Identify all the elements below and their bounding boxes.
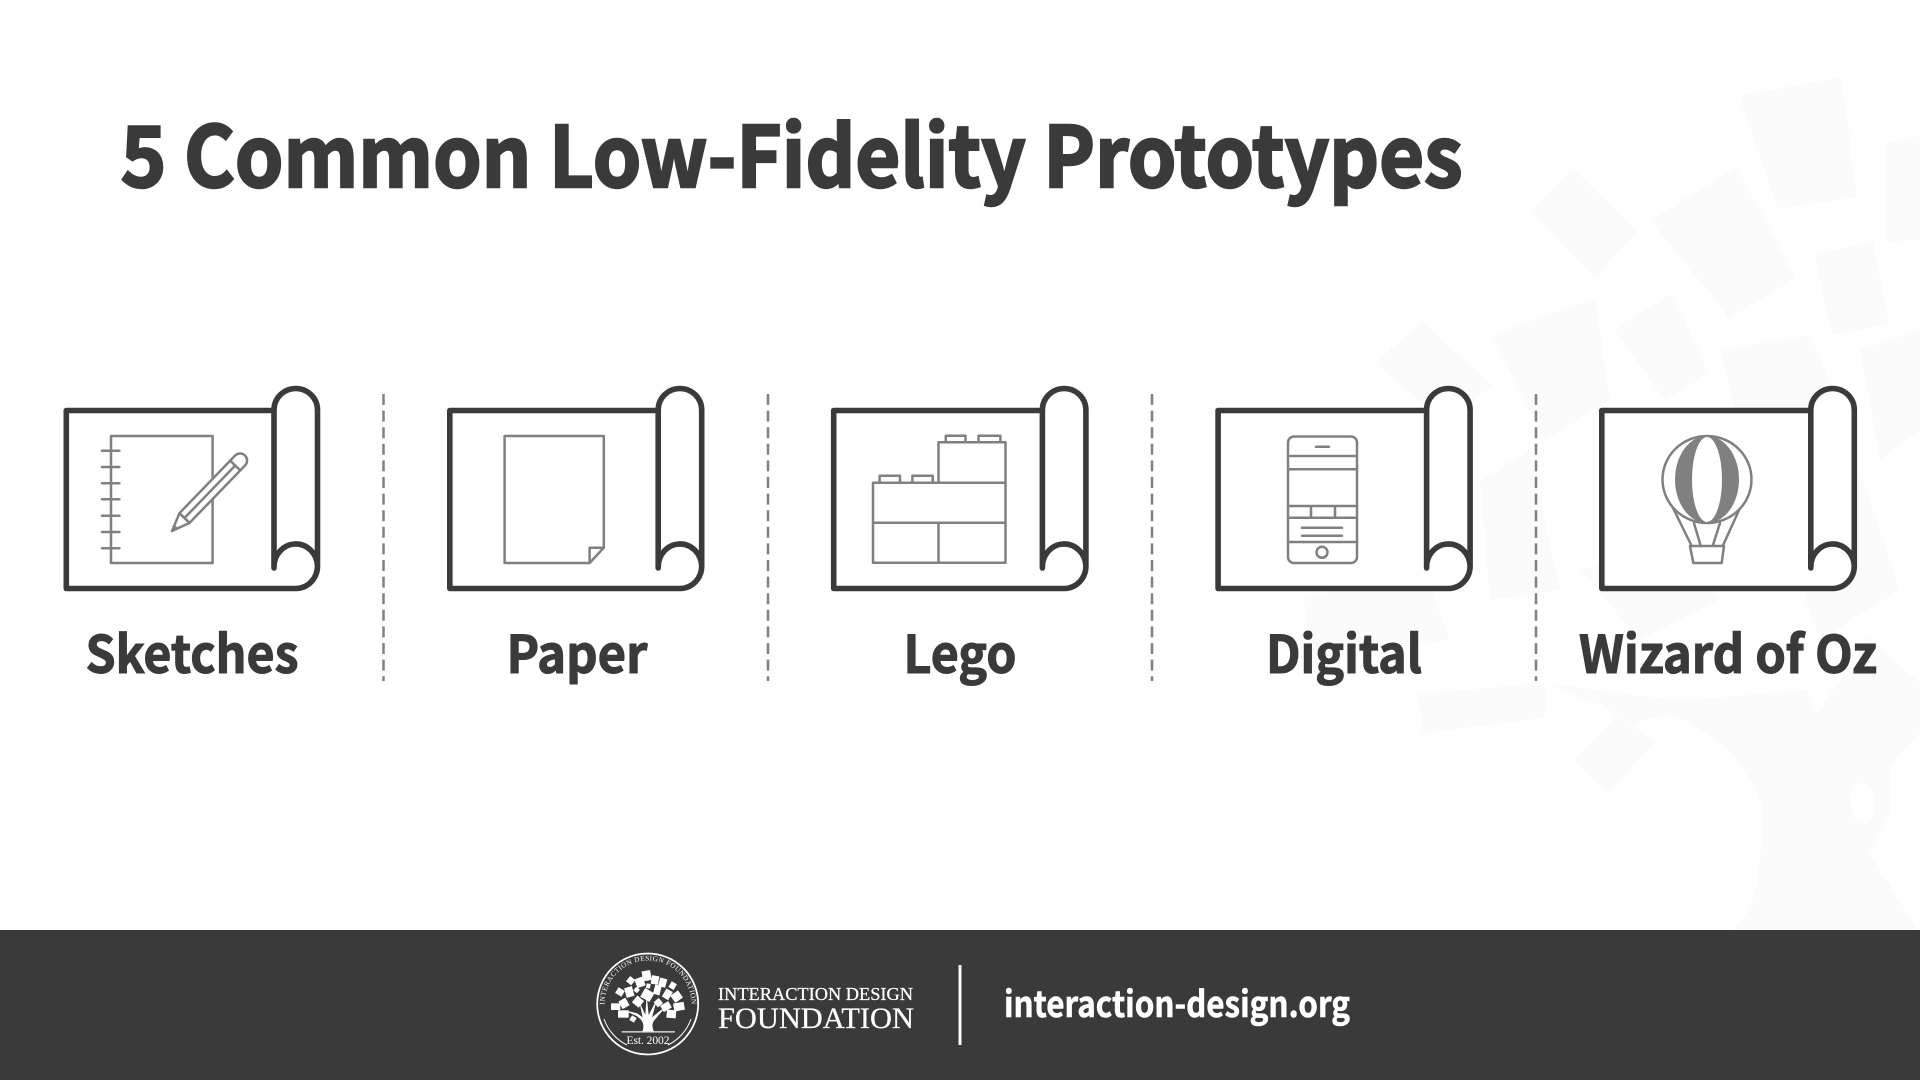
panel: paper (450, 388, 702, 688)
icon: scroll with hot air balloon (1602, 388, 1854, 588)
divider 2 (767, 394, 769, 681)
icon: scroll with sheet of paper (450, 388, 702, 588)
logo wordmark: INTERACTION DESIGN (718, 984, 913, 1004)
icon: scroll with sketchbook and pencil (66, 388, 318, 588)
footer divider (958, 965, 962, 1045)
footer bar (0, 930, 1920, 1080)
divider 3 (1151, 394, 1153, 681)
label: Lego: Lego (904, 613, 1016, 688)
icon: scroll with smartphone wireframe (1218, 388, 1470, 588)
logo wordmark: FOUNDATION (718, 1002, 914, 1035)
label: Sketches: Sketches (86, 613, 298, 688)
divider 4 (1535, 394, 1537, 681)
label: Wizard of Oz: Wizard of Oz (1579, 613, 1877, 688)
logo: IDF tree seal (596, 952, 700, 1056)
label: Digital: Digital (1266, 613, 1422, 688)
logo wordmark (718, 984, 914, 1035)
panel: lego (834, 388, 1086, 688)
panel: digital (1218, 388, 1470, 688)
logo: IDF tree seal: INTERACTION DESIGN FOUNDATION (600, 956, 696, 1004)
divider 1 (382, 394, 385, 681)
logo: IDF tree seal: Est. 2002 (626, 1035, 670, 1047)
panel: sketches (66, 388, 318, 688)
title: 5 Common Low-Fidelity Prototypes (121, 91, 1463, 212)
panel: wizard of oz (1579, 388, 1877, 688)
background: faint tree watermark (1304, 77, 1920, 930)
icon: scroll with lego bricks (834, 388, 1086, 588)
website url: interaction-design.org (1004, 976, 1350, 1028)
label: Paper: Paper (506, 613, 648, 688)
